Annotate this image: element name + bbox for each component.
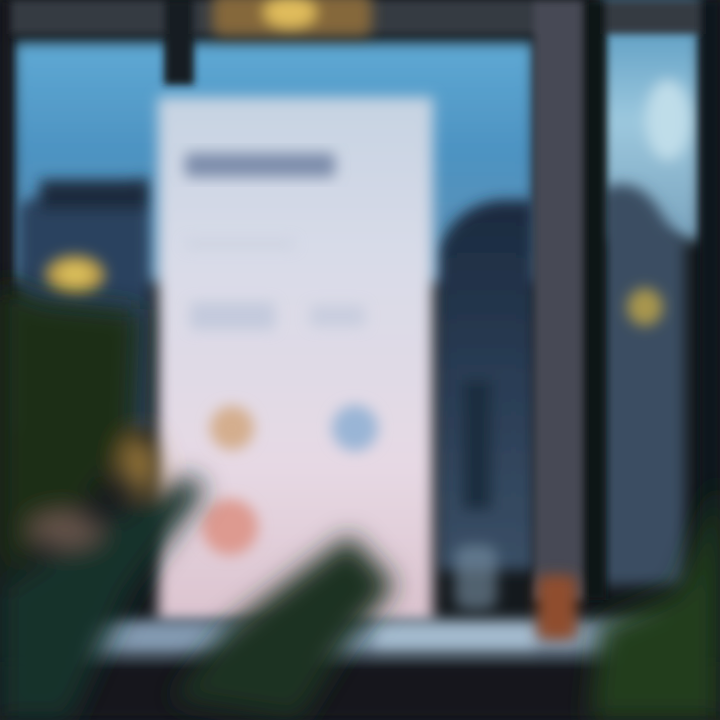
icon: orange circle bbox=[210, 406, 254, 450]
windowsill bbox=[0, 620, 720, 720]
poster text lines bbox=[185, 240, 365, 330]
window sky bbox=[14, 0, 700, 282]
icon: blue circle bbox=[332, 405, 378, 451]
distant buildings bbox=[18, 178, 685, 585]
foreground plants bbox=[0, 280, 720, 720]
poster bbox=[158, 97, 433, 622]
city lights bbox=[45, 255, 663, 326]
plant pot bbox=[455, 545, 577, 640]
poster sheet bbox=[158, 97, 433, 622]
icon: red circle bbox=[202, 499, 258, 555]
ceiling lamp bbox=[212, 0, 372, 36]
poster heading bbox=[185, 153, 335, 177]
